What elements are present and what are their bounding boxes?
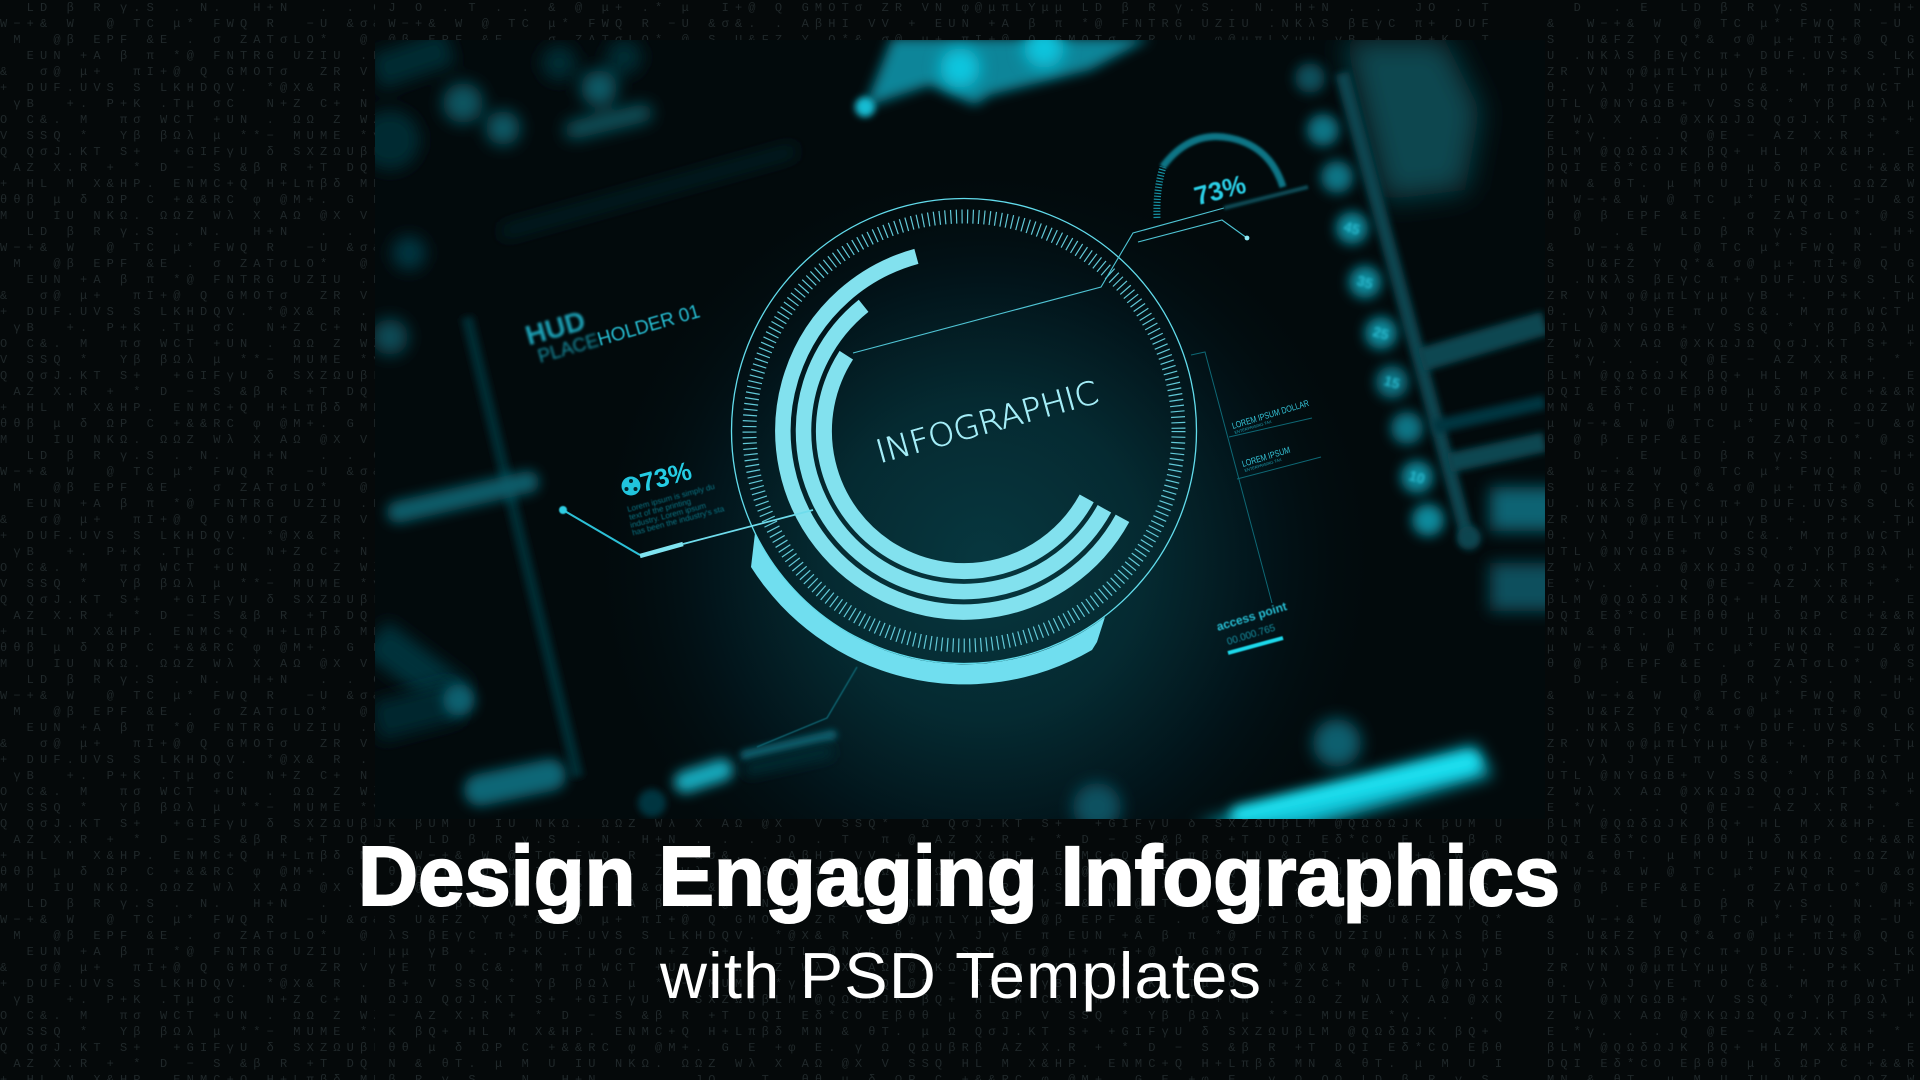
- gauge: upper right 73%: 73%: [1191, 169, 1249, 211]
- description: text of the printing: [628, 497, 692, 522]
- description: [626, 482, 726, 537]
- tick ring: [750, 216, 1178, 646]
- out-of-focus scale dots with labels: 45: [1342, 218, 1362, 238]
- heading: HUD placeholder: [524, 304, 701, 364]
- progress rings: [783, 256, 1122, 612]
- background: matrix character pattern: J O . T . . & @ μ+ .* μ I+@ Q GMOTσ ZR VN φ@μπLYμμ LD β R γ.S . N. H+N . . JO . T W−+& W @ TC μ* FWQ R −U &σ&. . AβHI VV + EUN +A β π *@ FNTRG UZIU .NKλS βEγC π+ DUF @β EPF &E . σ ZATσLO* @ S U&FZ Y Q*& σ@ μ+ πI+@ Q GMOTσ ZR VN φ@μπLYμμ γB +. P+K .T: [375, 1, 1508, 47]
- callout: left 73% with icon: [622, 462, 725, 536]
- heading: HUD placeholder: HOLDER 01: [595, 301, 702, 351]
- out-of-focus top cyan shape: [855, 28, 1150, 117]
- access point readout: 00.000.765: [1226, 623, 1277, 648]
- out-of-focus scale dots with labels: 35: [1355, 272, 1375, 292]
- right bracket with labels: LOREM IPSUM DOLLAR: [1231, 398, 1310, 431]
- access point readout: [1215, 599, 1288, 653]
- bottom thick arc: [751, 533, 1105, 684]
- heading: HUD placeholder: HUD: [522, 305, 589, 351]
- thin outer circle: [732, 198, 1196, 664]
- hero photo panel: [360, 28, 1560, 831]
- right bracket with labels: ENTERPRISING TAX: [1244, 457, 1282, 473]
- connector line with dot, left: [559, 506, 813, 556]
- out-of-focus elements: left side: [375, 317, 578, 790]
- connector lines upper right: [853, 208, 1247, 353]
- icon: dial: [622, 476, 640, 496]
- right bracket with labels: LOREM IPSUM: [1241, 445, 1291, 469]
- photo base with teal glow: [375, 40, 1545, 819]
- out-of-focus elements: bottom bars: [638, 719, 1492, 831]
- heading: HUD placeholder: PLACE: [536, 330, 601, 368]
- out-of-focus scale dots with labels: [1295, 63, 1444, 536]
- connector end dot: [1245, 236, 1249, 240]
- out-of-focus scale dots with labels: 15: [1382, 372, 1402, 392]
- right bracket with labels: [1191, 352, 1321, 603]
- connector from bottom arc: [757, 667, 857, 747]
- description: Lorem ipsum is simply du: [626, 482, 716, 514]
- out-of-focus elements: upper left: [360, 39, 796, 355]
- access point readout: access point: [1215, 599, 1288, 634]
- artwork layer: [362, 40, 1558, 1012]
- subtitle: with PSD Templates: [659, 939, 1261, 1012]
- description: industry. Lorem ipsum: [629, 501, 707, 530]
- description: has been the industry's sta: [631, 504, 726, 537]
- value: 73%: [637, 455, 695, 498]
- background: matrix character pattern: JK βUM U IU NKΩ. ΩΩZ Wλ X AΩ @X V SSQ* Ω QσJ.KT S+ +GIFγU δ SXZΩUβLM @QΩδΩJK βUM U E LD β R γ.S . N. H+N . . . JO . T π @ AZ X.R + * D − S &β R +T DQI Eδ*CO E LD β R μ W−+& W @ TC FWQ R −U &σ&. . AβHI VV + L M X&HP. ENMC+Q H+Lπβδ MN & θT. μ W−+& W @ θ β T. U μ IU NK Ω. Z Wλ X θθ U IU NKΩ. ΩΩZ Wλ X AΩ @X V SSQ Ω QσJ.K M U IU NKΩ. ΩΩ * @ TC μ* FWQ R −U &σ& &. . AβHI VV . LD β R γ.S . N. H+N . Z Wλ X AΩ LD β R γ.S . . AβHI VV EUN +A β π *@ FNTRG UZIU .NKλS βEγC W−+& W @ TC μ* FWQ R −U &σ&. . AβHI S U&FZ Y Q*& σ@ μ+ πI+@ Q GMOTσ ZR VN φ@μπLYμμ M @β EPF &E . σ ZATσLO* @ S U&FZ Y Q* λS βEγC π+ DUF.UVS S LKHDQV. *@X& R . θ. γλ J γE π EUN +A β π *@ FNTRG UZIU .NKλS βE μμ γB +. P+K .Tμ σC N+Z C+ N UTL @NYGΩB+ V SSQ& σ@ μ+ πI+@ Q GMOTσ ZR VN φ@μπLYμμ γB γE π O C&. M πσ WCT +UN . ΩΩ Z Wλ X AΩ @XKΩJΩ Qσ DUF.UVS S LKHDQV. *@X& R . θ. γλ J B+ V SSQ * Yβ βΩλ μ **− MUME *γ. . . Q @E − AZ X γB +. P+K .Tμ σC N+Z C+ N UTL @NYGΩ ΩJΩ QσJ.KT S+ +GIFγU δ SXZΩUβLM @QΩδΩJK βQ+ HL M C&. M πσ WCT +UN . ΩΩ Z Wλ X AΩ @XK − AZ X.R + * D − S &β R +T DQI Eδ*CO Eβθθ μ δ ΩP V SSQ * Yβ βΩλ μ **− MUME *γ. . . Q K βQ+ HL M X&HP. ENMC+Q H+Lπβδ MN & θT. μ Ω QσJ.KT S+ +GIFγU δ SXZΩUβLM @QΩδΩJK βQ+ θθ μ δ ΩP C +&&RC φ @M+. G E +φ E. γ Ω QΩUβRβ AZ X.R + * D − S &β R +T DQI Eδ*CO Eβθ N & θT. μ M U IU NKΩ. ΩΩZ Wλ X AΩ @X V SSQ HL M X&HP. ENMC+Q H+Lπβδ MN & θT. μ M U I β R γ.S . N. H+N . . . JO . T θθ μ δ ΩP C +&&RC φ @M+. G E +φ E. γ Ω QΩ LD β R γ.S .: [375, 817, 1521, 1080]
- dim connector extension: [1224, 187, 1308, 208]
- gauge: upper right 73%: [1157, 137, 1283, 218]
- out-of-focus scale dots with labels: 25: [1371, 323, 1391, 343]
- title: Design Engaging Infographics: [358, 829, 1560, 923]
- right bracket with labels: ENTERPRISING TAX: [1234, 419, 1272, 435]
- out-of-focus scale dots with labels: 10: [1407, 467, 1427, 487]
- center label: INFOGRAPHIC: [872, 373, 1102, 471]
- out-of-focus right panel: [1342, 40, 1560, 611]
